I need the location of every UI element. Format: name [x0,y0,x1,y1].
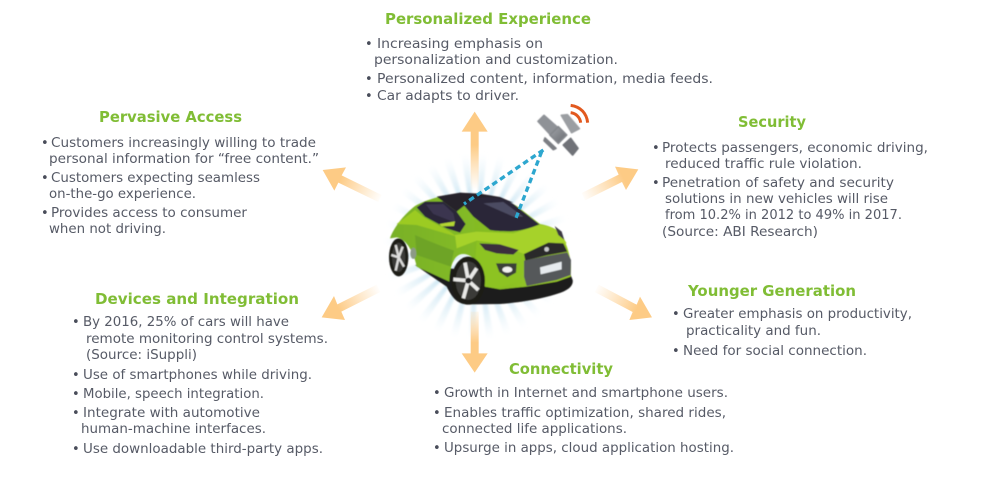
text block: younger generation bullets: • [672,344,680,359]
text block: personalized experience bullets: Increasing emphasis on [377,36,543,52]
heading: Personalized Experience: Personalized Experience [385,10,591,28]
text block: security bullets: solutions in new vehicles will rise [665,191,888,207]
panel: Security [652,113,928,240]
arrow: up to Personalized Experience [462,112,488,192]
text block: devices and integration bullets: • [72,368,80,383]
central illustration: car, satellite, arrows [322,105,652,373]
text block: security bullets: from 10.2% in 2012 to 49% in 2017. [665,207,902,223]
text block: devices and integration bullets: • [72,442,80,457]
text block: younger generation bullets: Greater emphasis on productivity, [683,306,912,322]
icon: satellite [538,115,579,155]
text block: security bullets: • [652,141,660,156]
arrow: lower left to Devices and Integration [322,285,380,320]
text block: personalized experience bullets: personalization and customization. [374,52,618,68]
text block: devices and integration bullets: By 2016, 25% of cars will have [83,314,289,330]
text block: devices and integration bullets: remote monitoring control systems. [86,331,328,347]
text block: pervasive access bullets: • [41,171,49,186]
text block: younger generation bullets [672,306,912,359]
text block: younger generation bullets: Need for social connection. [683,343,867,359]
text block: devices and integration bullets: Mobile, speech integration. [83,386,264,402]
text block: connectivity bullets: connected life applications. [442,421,627,437]
text block: security bullets: (Source: ABI Research) [662,224,818,240]
text block: younger generation bullets: • [672,307,680,322]
heading: Pervasive Access: Pervasive Access [99,108,242,126]
text block: security bullets: reduced traffic rule violation. [665,156,862,172]
text block: pervasive access bullets [41,135,319,237]
panel: Devices and Integration [72,290,328,457]
text block: devices and integration bullets: Integrate with automotive [83,405,260,421]
text block: connectivity bullets: Upsurge in apps, cloud application hosting. [444,440,734,456]
panel: Younger Generation [672,282,912,359]
text block: devices and integration bullets: • [72,406,80,421]
text block: younger generation bullets: practicality and fun. [686,323,821,339]
text block: personalized experience bullets: • [365,37,373,52]
panel: Connectivity [433,360,734,456]
arrow: upper left to Pervasive Access [323,167,382,202]
arrow: upper right to Security [582,167,638,200]
text block: security bullets [652,140,928,240]
text block: devices and integration bullets: human-machine interfaces. [81,421,266,437]
text block: pervasive access bullets: Provides access to consumer [51,205,247,221]
heading: Connectivity: Connectivity [509,360,613,378]
text block: connectivity bullets [433,385,734,456]
text block: devices and integration bullets: (Source: iSuppli) [86,347,197,363]
text block: connectivity bullets: Growth in Internet and smartphone users. [444,385,728,401]
text block: pervasive access bullets: personal information for “free content.” [49,151,319,167]
text block: pervasive access bullets: when not driving. [49,221,166,237]
text block: personalized experience bullets: • [365,72,373,87]
text block: pervasive access bullets: • [41,136,49,151]
panel: Pervasive Access [41,108,319,237]
text block: security bullets: Protects passengers, economic driving, [662,140,928,156]
text block: connectivity bullets: Enables traffic optimization, shared rides, [444,405,726,421]
car illustration [389,193,573,305]
heading: Security: Security [738,113,806,131]
text block: security bullets: • [652,176,660,191]
panel: Personalized Experience [365,10,713,104]
text block: personalized experience bullets: Personalized content, information, media feeds. [377,71,713,87]
text block: devices and integration bullets: Use of smartphones while driving. [83,367,312,383]
blue radial rays behind the car [429,199,524,294]
text block: connectivity bullets: • [433,386,441,401]
text block: devices and integration bullets: • [72,315,80,330]
text block: pervasive access bullets: Customers increasingly willing to trade [51,135,316,151]
text block: personalized experience bullets: Car adapts to driver. [377,88,519,104]
arrow: lower right to Younger Generation [595,285,652,320]
text block: connectivity bullets: • [433,441,441,456]
text block: devices and integration bullets: Use downloadable third-party apps. [83,441,323,457]
icon: orange signal waves [571,105,588,123]
text block: devices and integration bullets [72,314,328,457]
dotted signal lines from satellite to car [464,150,543,221]
text block: personalized experience bullets: • [365,89,373,104]
text block: personalized experience bullets [365,36,713,104]
text block: pervasive access bullets: Customers expecting seamless [51,170,260,186]
text block: devices and integration bullets: • [72,387,80,402]
text block: security bullets: Penetration of safety and security [662,175,894,191]
text block: connectivity bullets: • [433,406,441,421]
heading: Younger Generation: Younger Generation [687,282,856,300]
text block: pervasive access bullets: • [41,206,49,221]
arrow: down to Connectivity [462,312,488,373]
text block: pervasive access bullets: on-the-go experience. [49,186,196,202]
heading: Devices and Integration: Devices and Integration [95,290,299,308]
